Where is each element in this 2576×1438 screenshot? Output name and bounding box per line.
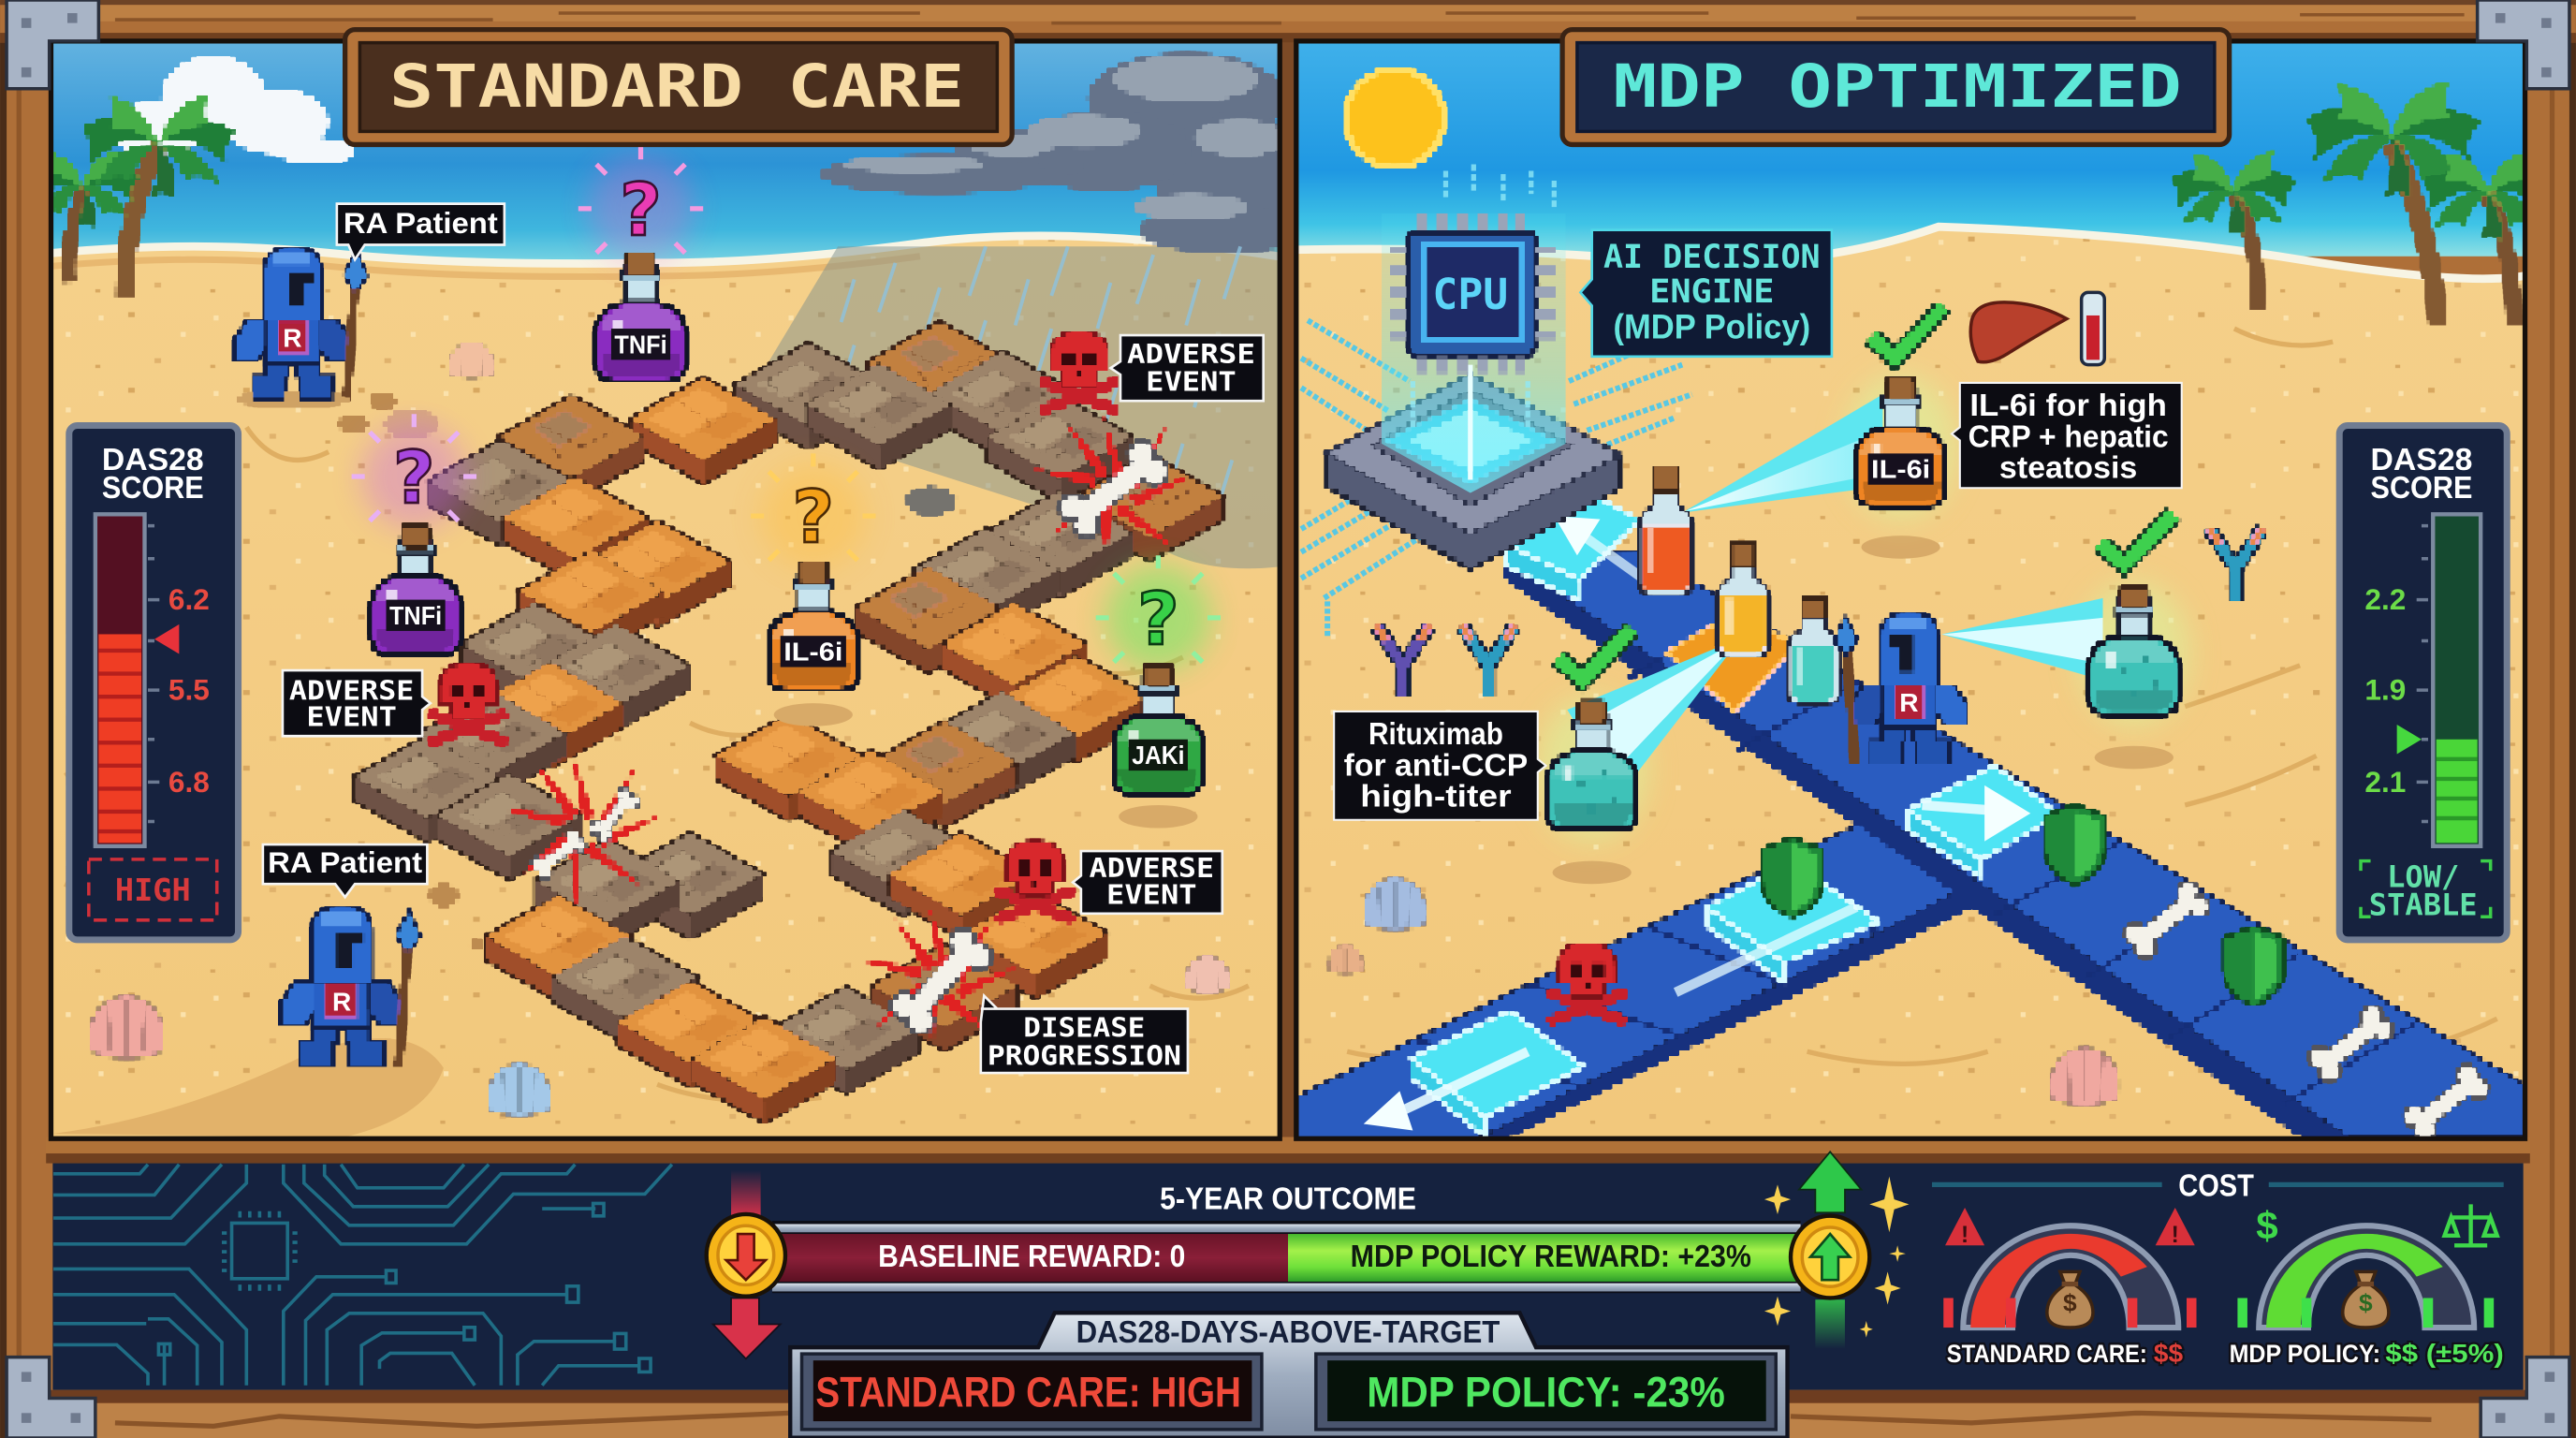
title: standard care: STANDARD CARE: [389, 51, 964, 121]
vial: TNFi lower: ?: [393, 436, 435, 521]
vial: JAKi: ?: [1137, 578, 1179, 662]
callout: AI decision engine: (MDP Policy): [1613, 308, 1810, 346]
vial: JAKi: [1096, 555, 1221, 829]
vial: TNFi top: TNFi: [614, 330, 667, 359]
gauge: DAS28 high: 6.8: [168, 765, 210, 799]
gauge: DAS28 low: 2.2: [2364, 582, 2406, 616]
callout: rituximab rule: [1334, 712, 1546, 820]
vial: IL-6i: ?: [792, 476, 834, 560]
scenery left: [27, 52, 1318, 1116]
sky and sea: [52, 43, 1278, 263]
shells right: [1328, 877, 2118, 1105]
knight: MDP patient: [1835, 613, 1967, 764]
vial: IL-6i selected: [1856, 307, 1945, 506]
readout: MDP policy: [1316, 1354, 1776, 1430]
vial halos: [1536, 374, 2190, 842]
reward bar: [772, 1221, 1801, 1293]
readout: standard care: [802, 1354, 1262, 1430]
vial: TNFi lower: TNFi: [389, 601, 442, 630]
callout: rituximab rule: Rituximab: [1368, 717, 1503, 752]
icon: liver: [1970, 302, 2067, 362]
vial: rituximab: [1377, 626, 1636, 829]
circuit pattern: [53, 1165, 672, 1386]
vial: TNFi top: [578, 146, 703, 381]
band to bottom right: [1505, 552, 2530, 1151]
corner bracket: top right: [2478, 0, 2569, 89]
adverse event left: EVENT: [306, 702, 397, 733]
arrow: reward down: [707, 1170, 785, 1358]
callout: IL-6i rule: [1952, 383, 2182, 488]
cost gauge: MDP policy: [2230, 1203, 2504, 1368]
white clouds: [107, 56, 355, 165]
palm trees right: [2173, 81, 2554, 325]
adverse event lower: [1001, 842, 1222, 918]
knight: RA patient bottom: R: [332, 987, 351, 1016]
vial: IL-6i: [751, 453, 875, 726]
adverse event lower: EVENT: [1106, 879, 1197, 910]
gauge: DAS28 high: 6.2: [168, 582, 210, 616]
callout: AI decision engine: ENGINE: [1649, 272, 1774, 311]
gauge: DAS28 low: [2339, 426, 2507, 940]
callout: IL-6i rule: CRP + hepatic: [1969, 419, 2169, 454]
sky and sea: [1298, 43, 2524, 257]
DAS28 days above target plate: [790, 1313, 1788, 1438]
platform: [1327, 453, 1620, 568]
rain streaks: [839, 245, 1242, 494]
optimized blue path: [1299, 493, 2530, 1160]
band to bottom left: [1299, 814, 1978, 1160]
vial: TNFi top: ?: [620, 169, 662, 253]
corner bracket: bottom left: [7, 1357, 95, 1438]
label: RA Patient top: RA Patient: [344, 206, 498, 240]
gauge: DAS28 high: 5.5: [168, 673, 210, 707]
adverse event skull on path: [1553, 943, 1621, 1020]
cost gauge: MDP policy: $: [2359, 1289, 2373, 1317]
light column: [1382, 213, 1566, 493]
callout: AI decision engine: AI DECISION: [1603, 238, 1821, 276]
sun: [1345, 69, 1444, 168]
chip: [1390, 213, 1554, 373]
label: RA Patient bottom: [263, 844, 427, 897]
gauge: DAS28 high: [69, 426, 239, 940]
DAS28 days above target plate: DAS28-DAYS-ABOVE-TARGET: [1076, 1315, 1500, 1350]
callout: rituximab rule: high-titer: [1360, 780, 1512, 814]
gauge: DAS28 high: SCORE: [102, 471, 204, 506]
shells and pebbles left: [90, 342, 1229, 1116]
reward bar: BASELINE REWARD: 0: [878, 1240, 1185, 1274]
cost gauge: standard care: !: [1961, 1223, 1969, 1248]
heading: cost: COST: [2178, 1169, 2254, 1204]
panel borders: [51, 41, 2525, 1138]
AI decision engine CPU: CPU: [1432, 270, 1508, 319]
callout: IL-6i rule: IL-6i for high: [1969, 389, 2167, 423]
cost gauge: standard care: [1943, 1208, 2197, 1368]
knight: MDP patient: R: [1899, 688, 1919, 717]
adverse event upper right: [1045, 332, 1264, 409]
corner bracket: top left: [7, 0, 98, 89]
knight: RA patient top: [235, 248, 366, 407]
reward bar: MDP POLICY REWARD: +23%: [1351, 1240, 1751, 1274]
vial: teal selected: [2089, 514, 2262, 714]
title: standard care: [345, 30, 1012, 144]
winding cracked path: [355, 322, 1222, 1123]
heading: 5-year outcome: 5-YEAR OUTCOME: [1160, 1182, 1416, 1217]
adverse event left: [283, 664, 503, 741]
knight: RA patient top: R: [283, 323, 302, 352]
readout: standard care: STANDARD CARE: HIGH: [815, 1368, 1241, 1416]
AI decision engine CPU: [1301, 165, 1692, 638]
cost gauge: MDP policy: $: [2256, 1203, 2278, 1247]
title: MDP optimized: [1562, 30, 2230, 144]
treatment beams: [1567, 394, 2102, 795]
cost gauge: standard care: $$: [2154, 1339, 2184, 1368]
adverse event left: ADVERSE: [289, 676, 414, 707]
disease progression label: PROGRESSION: [988, 1040, 1181, 1071]
cost gauge: MDP policy: MDP POLICY:: [2230, 1339, 2380, 1368]
gauge: DAS28 high: DAS28: [102, 443, 204, 477]
label: RA Patient top: [337, 204, 505, 259]
data lines: [1301, 320, 1692, 638]
corner bracket: bottom right: [2481, 1357, 2569, 1438]
path vials: [1640, 466, 1838, 703]
vial: JAKi: JAKi: [1132, 741, 1184, 770]
storm shade: [739, 246, 1278, 568]
cost gauge: MDP policy: $$ (±5%): [2385, 1339, 2504, 1368]
disease progression label: [981, 996, 1188, 1073]
vial: IL-6i: IL-6i: [783, 638, 842, 667]
callout: AI decision engine: [1580, 230, 1832, 357]
panel: standard care: [27, 43, 1318, 1137]
cost gauge: standard care: !: [2172, 1223, 2179, 1248]
disease progression label: DISEASE: [1023, 1012, 1145, 1043]
storm clouds: [822, 52, 1318, 253]
knight: RA patient bottom: [282, 907, 419, 1065]
adverse event upper right: EVENT: [1146, 367, 1237, 398]
sand right: [1298, 227, 2524, 1137]
gauge: DAS28 low: STABLE: [2369, 889, 2478, 923]
arrow: reward up: [1764, 1152, 1909, 1349]
panel: outcomes bar: [52, 1164, 2524, 1390]
cost gauge: standard care: $: [2063, 1289, 2077, 1317]
gauge: DAS28 low: 1.9: [2364, 673, 2406, 707]
gauge: DAS28 low: 2.1: [2364, 765, 2406, 799]
title: MDP optimized: MDP OPTIMIZED: [1613, 51, 2182, 121]
icon: blood tube: [2082, 292, 2104, 365]
sand left: [52, 236, 1278, 1137]
readout: MDP policy: MDP POLICY: -23%: [1367, 1368, 1725, 1416]
label: RA Patient bottom: RA Patient: [268, 845, 423, 879]
adverse event upper right: ADVERSE: [1127, 339, 1255, 370]
panel: MDP optimized: [1298, 43, 2554, 1160]
gauge: DAS28 low: SCORE: [2371, 471, 2472, 506]
callout: rituximab rule: for anti-CCP: [1344, 748, 1528, 783]
glowing tiles: [1412, 493, 2060, 1137]
shields: [1763, 805, 2284, 1005]
gauge: DAS28 low: LOW/: [2387, 861, 2459, 895]
flow arrows: [1364, 516, 2030, 1130]
gauge: DAS28 low: DAS28: [2371, 443, 2472, 477]
gauge: DAS28 high: HIGH: [115, 872, 191, 908]
bone fractures: [504, 418, 1190, 1057]
cost gauge: standard care: STANDARD CARE:: [1947, 1339, 2147, 1368]
vial: IL-6i selected: IL-6i: [1871, 455, 1930, 484]
vial: TNFi lower: [352, 414, 476, 654]
shadows: [1553, 536, 2174, 884]
callout: IL-6i rule: steatosis: [1999, 451, 2137, 486]
adverse event lower: ADVERSE: [1090, 853, 1214, 884]
bones on path: [2122, 879, 2492, 1143]
palm trees left: [53, 95, 236, 298]
